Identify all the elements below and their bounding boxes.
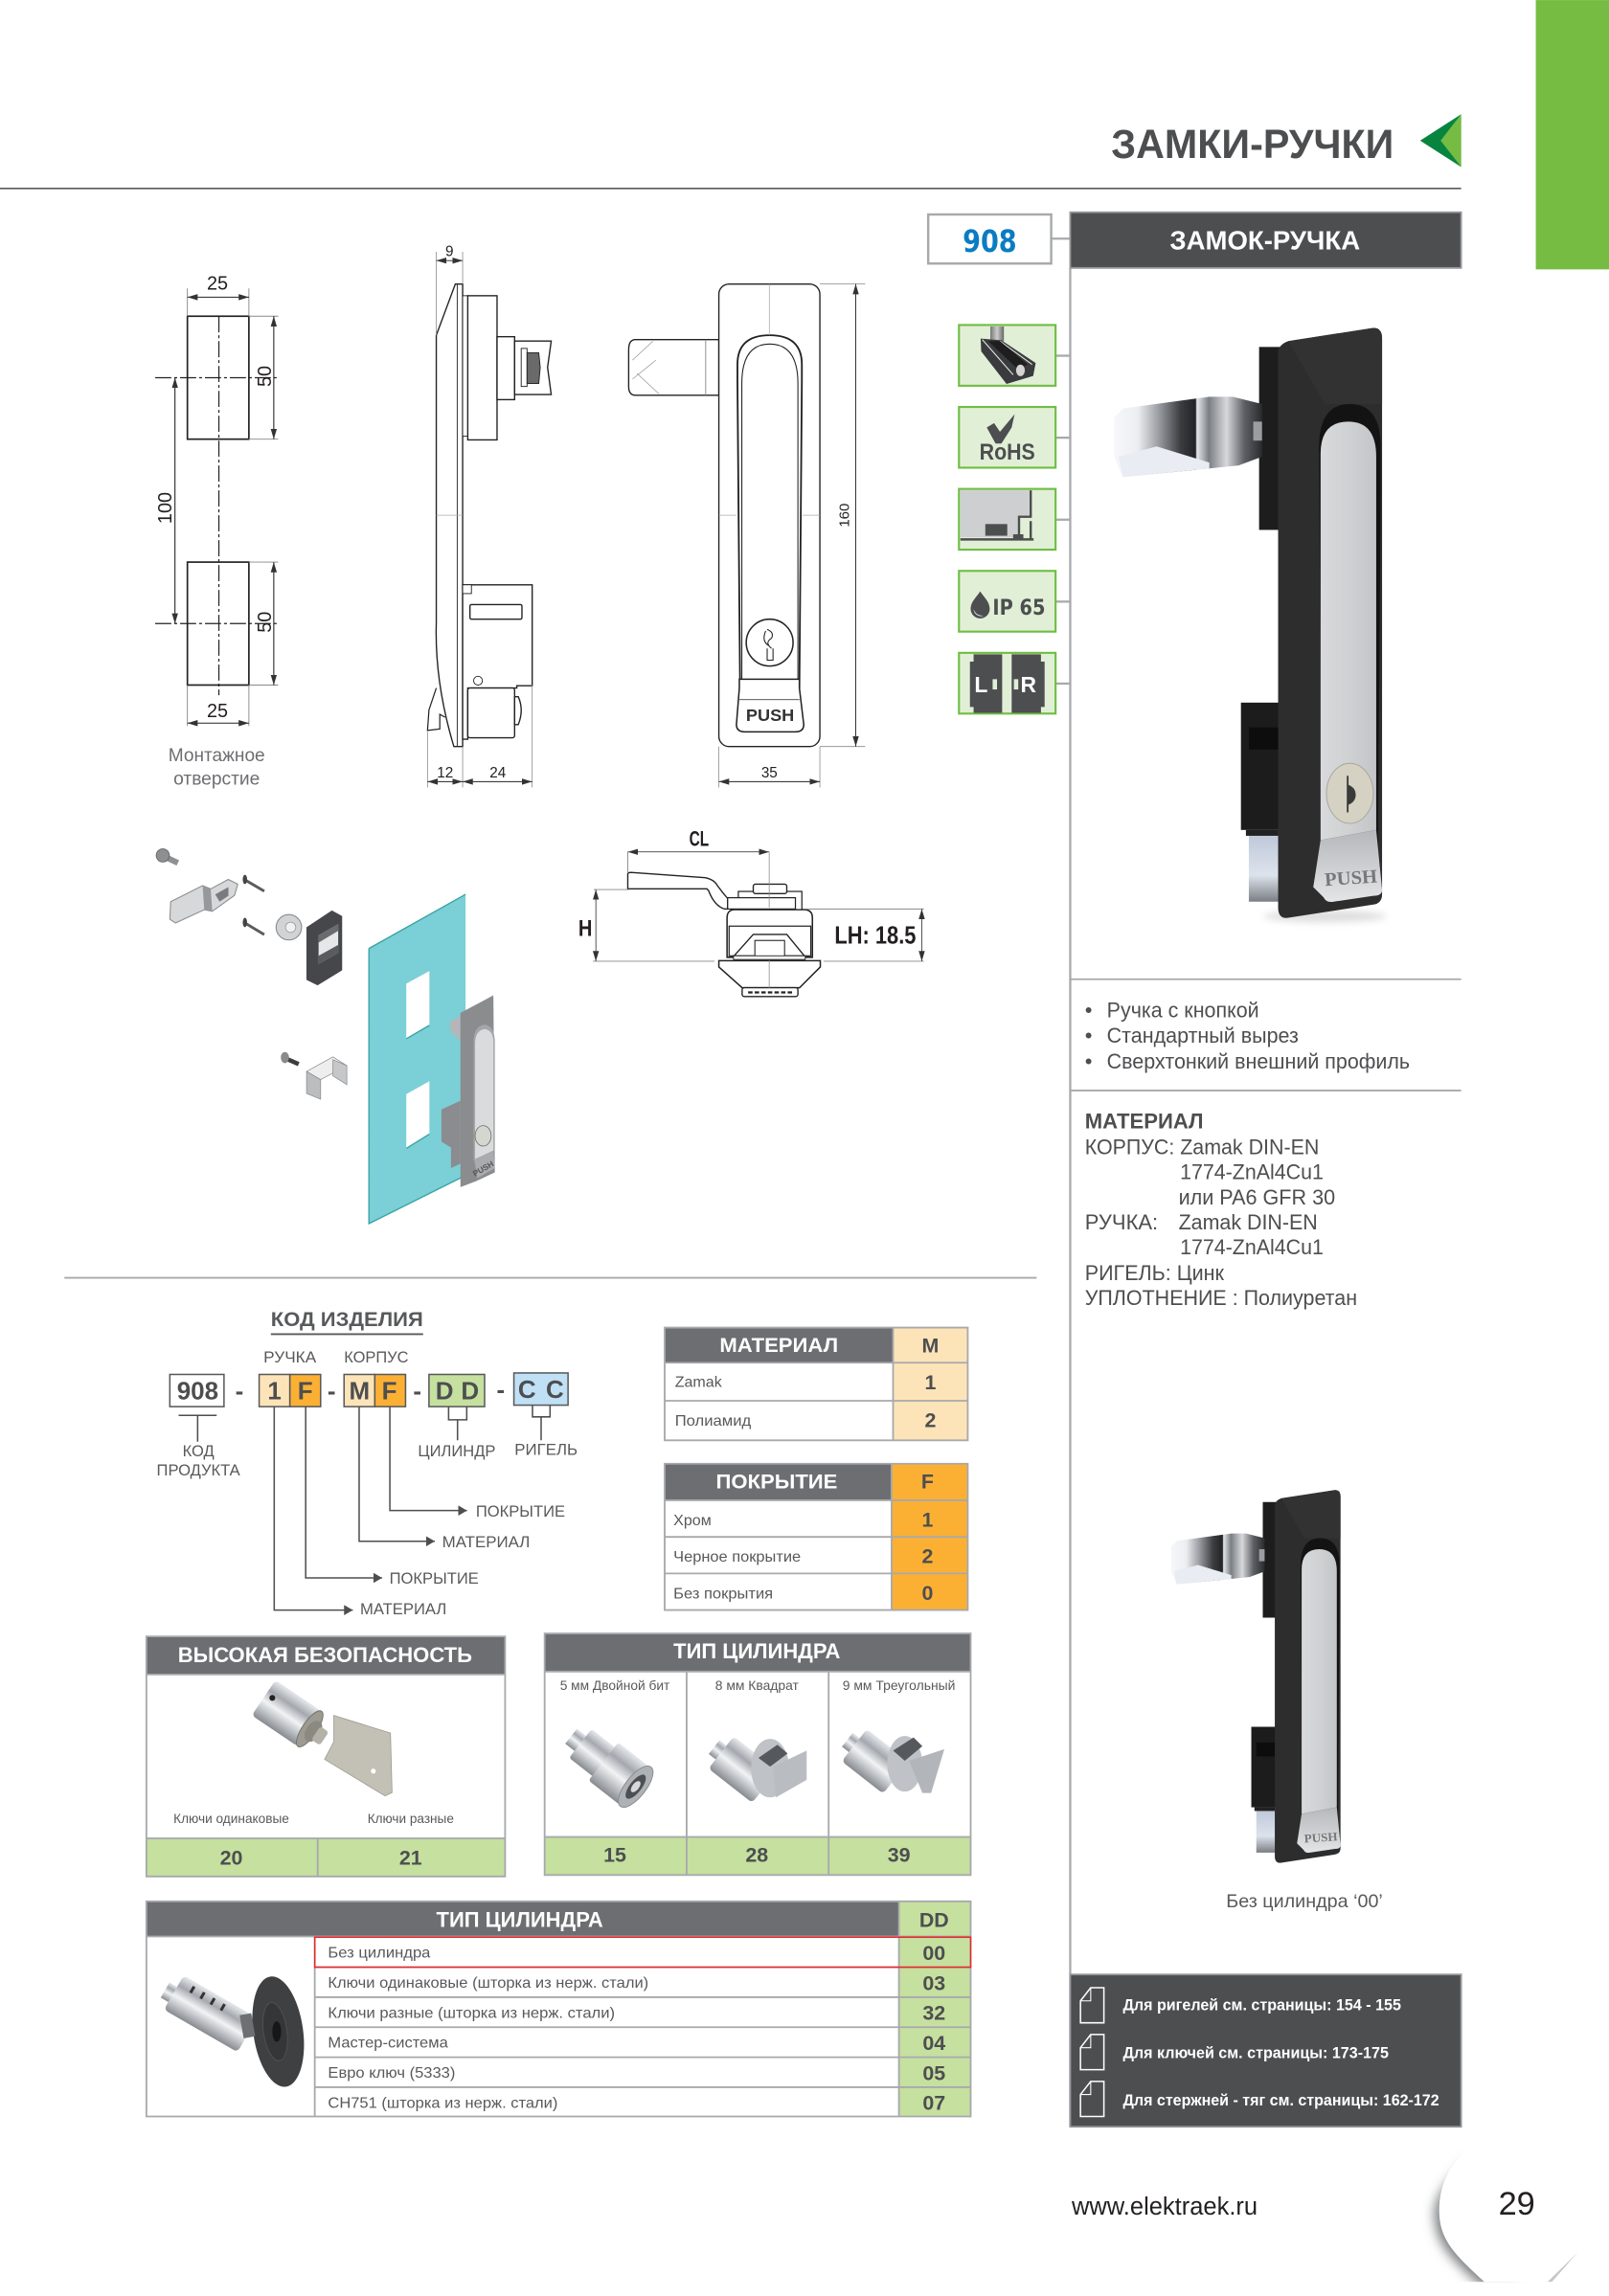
- table: cylinder types: ТИП ЦИЛИНДРА: [437, 1908, 603, 1932]
- table codes: 32: [922, 2002, 945, 2025]
- table rows: Без цилиндра: [328, 1945, 430, 1962]
- table: material: Полиамид: [675, 1412, 752, 1429]
- product photo: handle lock without cylinder: [1171, 1490, 1341, 1863]
- table: material: МАТЕРИАЛ: [719, 1334, 838, 1357]
- caption: no cylinder: Без цилиндра ‘00’: [1226, 1892, 1383, 1912]
- table codes: 03: [922, 1971, 945, 1994]
- table: material: 1: [925, 1371, 937, 1394]
- icon: cylinder with key: [252, 1680, 392, 1796]
- icon: left/right: [959, 653, 1070, 713]
- header: product name: ЗАМОК-РУЧКА: [1169, 226, 1360, 256]
- table rows: [328, 1945, 648, 2111]
- green corner tab: [1536, 0, 1609, 269]
- dimension labels: 12: [437, 765, 453, 781]
- icon: cylinder with black key: [156, 1971, 310, 2090]
- code captions: ЦИЛИНДР: [418, 1443, 495, 1460]
- product photo: handle lock with key: PUSH: [1324, 866, 1378, 890]
- hardware parts: [156, 849, 347, 1099]
- caption: mounting hole: Монтажное: [169, 745, 265, 766]
- panel: cylinder insert types: 28: [745, 1844, 768, 1867]
- panel: cylinder insert types: 15: [603, 1844, 626, 1867]
- icon: mounting section: [959, 489, 1070, 550]
- dimension labels: 9: [445, 244, 454, 260]
- feature list: Сверхтонкий внешний профиль: [1107, 1049, 1410, 1073]
- feature list: •: [1085, 1049, 1092, 1073]
- code captions: МАТЕРИАЛ: [360, 1601, 446, 1618]
- product code diagram: РУЧКА: [263, 1349, 316, 1366]
- table codes: [922, 1942, 945, 2115]
- table: material: M: [922, 1335, 939, 1358]
- code captions: РИГЕЛЬ: [514, 1442, 578, 1459]
- latch dimension labels: H: [578, 916, 592, 942]
- code letters: D: [461, 1376, 479, 1405]
- table: finish: ПОКРЫТИЕ: [716, 1471, 837, 1494]
- panel: high security: Ключи разные: [368, 1812, 454, 1826]
- lock on panel: [442, 996, 495, 1187]
- code captions: КОД: [183, 1443, 215, 1460]
- latch dimension labels: CL: [690, 827, 709, 851]
- code letters: C: [546, 1375, 564, 1404]
- page curl with page number: [1427, 2164, 1576, 2283]
- dimension labels: 100: [155, 492, 176, 524]
- icon: square insert: [701, 1731, 806, 1803]
- table: finish: [665, 1464, 967, 1610]
- icon: green arrow: [1420, 114, 1462, 167]
- table codes: 07: [922, 2092, 945, 2115]
- icon: double bit insert: [555, 1717, 659, 1812]
- page title: ЗАМКИ-РУЧКИ: [1111, 122, 1394, 168]
- code letters: -: [496, 1375, 505, 1404]
- icon: left/right: L: [974, 672, 987, 697]
- drawing: side view: [427, 244, 552, 787]
- material specification text: Zamak DIN-EN: [1179, 1210, 1318, 1234]
- panel: high security: ВЫСОКАЯ БЕЗОПАСНОСТЬ: [178, 1643, 472, 1667]
- reference text: Для ключей см. страницы: 173-175: [1122, 2044, 1389, 2061]
- code letters: F: [298, 1376, 313, 1405]
- drawing: front view: 35: [761, 765, 778, 781]
- drawing: front view: [628, 284, 865, 787]
- page curl with page number: 29: [1499, 2186, 1535, 2222]
- drawing: latch cross-section: [578, 827, 924, 997]
- table: finish: 2: [921, 1545, 933, 1568]
- table rows: СН751 (шторка из нерж. стали): [328, 2094, 557, 2111]
- material specification text: РУЧКА:: [1085, 1210, 1158, 1234]
- icon: seal profile: [959, 325, 1070, 386]
- panel: high security: Ключи одинаковые: [173, 1812, 289, 1826]
- feature list: Ручка с кнопкой: [1107, 998, 1259, 1022]
- code letters: 1: [267, 1376, 282, 1405]
- feature icons column: [959, 325, 1070, 713]
- feature list: [1070, 979, 1462, 1091]
- material specification text: МАТЕРИАЛ: [1085, 1110, 1204, 1134]
- feature list: •: [1085, 998, 1092, 1022]
- code letters: -: [413, 1376, 421, 1405]
- panel: page references: [1070, 1974, 1462, 2127]
- dimension labels: [437, 244, 507, 781]
- product number box: [928, 214, 1052, 263]
- table: finish: Хром: [673, 1512, 712, 1529]
- icon: document: [1080, 1988, 1104, 2117]
- icon: left/right: R: [1020, 672, 1036, 697]
- drawing: front view: 160: [837, 504, 853, 528]
- feature list: Стандартный вырез: [1107, 1024, 1299, 1047]
- material specification text: РИГЕЛЬ: Цинк: [1085, 1261, 1224, 1285]
- code letters: [177, 1375, 564, 1405]
- product number box: 908: [963, 223, 1017, 259]
- product photo: handle lock without cylinder: PUSH: [1303, 1830, 1338, 1846]
- material specification text: 1774-ZnAl4Cu1: [1180, 1159, 1324, 1183]
- code letters: C: [518, 1375, 536, 1404]
- panel: cylinder insert types: 39: [888, 1844, 911, 1867]
- code letters: F: [382, 1376, 397, 1405]
- icon: RoHS: RoHS: [980, 439, 1035, 465]
- header: product name: [1070, 213, 1462, 268]
- reference text: [1122, 1997, 1439, 2109]
- code letters: -: [236, 1376, 243, 1405]
- caption: mounting hole: [169, 745, 265, 789]
- caption: mounting hole: отверстие: [173, 768, 260, 789]
- panel: cylinder insert types: 9 мм Треугольный: [843, 1678, 955, 1693]
- dimension labels: 50: [255, 366, 276, 387]
- icon: IP 65: IP 65: [992, 596, 1045, 620]
- product photo: handle lock with key: [1114, 327, 1387, 922]
- material specification text: КОРПУС: Zamak DIN-EN: [1085, 1135, 1319, 1159]
- icon: RoHS: [959, 407, 1070, 467]
- table codes: 00: [922, 1942, 945, 1965]
- lock on panel: PUSH: [471, 1159, 495, 1179]
- code letters: -: [328, 1376, 336, 1405]
- latch dimension labels: [578, 827, 916, 950]
- drawing: exploded assembly: [156, 849, 495, 1224]
- code captions: ПОКРЫТИЕ: [476, 1503, 565, 1520]
- connector lines: [178, 1406, 550, 1610]
- reference text: Для стержней - тяг см. страницы: 162-172: [1122, 2092, 1439, 2109]
- table: finish: F: [921, 1471, 934, 1494]
- front view labels: PUSH: [746, 706, 794, 725]
- table: cylinder types: DD: [919, 1909, 949, 1932]
- heading: КОД ИЗДЕЛИЯ: [271, 1308, 423, 1331]
- product code diagram: [157, 1308, 578, 1618]
- feature list: •: [1085, 1024, 1092, 1047]
- table: material: [665, 1328, 967, 1440]
- material specification text: УПЛОТНЕНИЕ : Полиуретан: [1085, 1286, 1357, 1310]
- panel: high security: 20: [220, 1847, 243, 1870]
- table rows: Мастер-система: [328, 2035, 448, 2052]
- table rows: Ключи одинаковые (шторка из нерж. стали): [328, 1974, 648, 1992]
- website: www.elektraek.ru: [1071, 2192, 1258, 2220]
- panel: cylinder insert types: ТИП ЦИЛИНДРА: [673, 1639, 840, 1663]
- table codes: 05: [922, 2061, 945, 2084]
- icon: triangle insert: [835, 1723, 944, 1793]
- table: finish: Без покрытия: [673, 1585, 773, 1602]
- dimension labels: 25: [207, 701, 228, 722]
- reference text: Для ригелей см. страницы: 154 - 155: [1122, 1997, 1401, 2015]
- material specification text: [1085, 1110, 1357, 1310]
- dimension labels: [155, 274, 276, 722]
- table rows: Ключи разные (шторка из нерж. стали): [328, 2004, 615, 2021]
- product code diagram: КОРПУС: [344, 1349, 409, 1366]
- panel: high security: 21: [399, 1847, 422, 1870]
- code captions: МАТЕРИАЛ: [442, 1534, 530, 1551]
- dimension labels: 25: [207, 274, 228, 295]
- material specification text: или PA6 GFR 30: [1179, 1185, 1335, 1209]
- dimension labels: 50: [255, 612, 276, 633]
- code letters: 908: [177, 1376, 218, 1405]
- drawing: mounting cutout: [155, 274, 278, 789]
- code captions: ПОКРЫТИЕ: [390, 1570, 479, 1587]
- icon: IP 65: [959, 571, 1070, 632]
- code boxes: [170, 1373, 568, 1407]
- code captions: [157, 1442, 578, 1618]
- material specification text: 1774-ZnAl4Cu1: [1180, 1235, 1324, 1259]
- panel: cylinder insert types: 8 мм Квадрат: [715, 1678, 800, 1693]
- code letters: D: [436, 1376, 453, 1405]
- table: material: Zamak: [675, 1373, 723, 1390]
- latch dimension labels: LH: 18.5: [834, 923, 916, 950]
- panel: cylinder insert types: 5 мм Двойной бит: [560, 1678, 670, 1693]
- panel: cylinder insert types: [545, 1633, 971, 1875]
- panel: high security: [147, 1636, 505, 1877]
- table: finish: 1: [921, 1508, 933, 1531]
- table codes: 04: [922, 2032, 945, 2055]
- table: cylinder types: [147, 1902, 971, 2117]
- code captions: ПРОДУКТА: [157, 1462, 240, 1479]
- code letters: M: [349, 1376, 370, 1405]
- table: material: 2: [925, 1409, 937, 1432]
- table: finish: Черное покрытие: [673, 1548, 801, 1565]
- dimension labels: 24: [489, 765, 507, 781]
- table rows: Евро ключ (5333): [328, 2064, 455, 2082]
- table: finish: 0: [921, 1582, 933, 1605]
- teal panel: [369, 894, 465, 1224]
